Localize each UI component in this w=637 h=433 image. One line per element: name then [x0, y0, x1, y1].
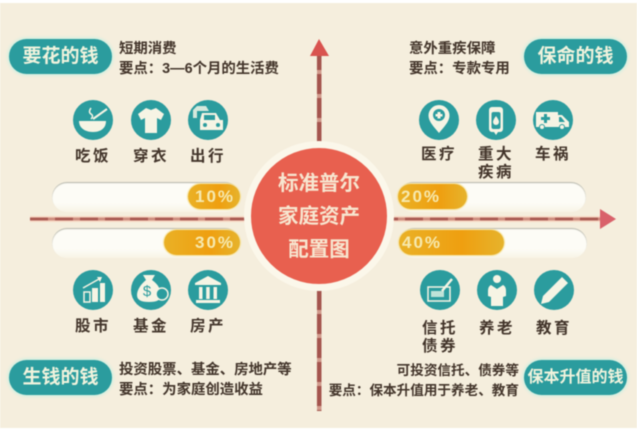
- icon: bank building: [187, 269, 229, 311]
- icon: t-shirt: [130, 99, 172, 141]
- label: 房产: 房产: [190, 318, 226, 335]
- pill: 保命的钱: 保命的钱: [537, 46, 614, 67]
- progress bar: 30%: 30%: [195, 233, 235, 252]
- progress bar: 10%: [52, 182, 240, 212]
- label: 养老: 养老: [479, 320, 515, 337]
- pill: 保本升值的钱: 保本升值的钱: [527, 369, 624, 386]
- center circle: 标准普尔: [278, 172, 360, 195]
- progress bar: 30%: [52, 228, 240, 258]
- text: investment: [118, 360, 292, 398]
- icon: ambulance: [532, 99, 574, 141]
- center circle: 配置图: [288, 238, 350, 261]
- progress bar: 10%: 10%: [195, 187, 235, 206]
- icon: cheque: [419, 269, 461, 311]
- text: short-term spending: 短期消费: [119, 41, 177, 57]
- label: 信托债券: [422, 319, 458, 354]
- label: 车祸: 车祸: [535, 146, 571, 163]
- pill: 保命的钱: [524, 39, 627, 74]
- label: 穿衣: 穿衣: [133, 148, 169, 165]
- label: 出行: 出行: [190, 148, 226, 165]
- icon: location pin: [418, 99, 460, 141]
- center circle: 家庭资产: [278, 205, 360, 228]
- progress bar: 40%: 40%: [402, 233, 442, 252]
- pill: 保本升值的钱: [524, 360, 627, 395]
- progress bar: 20%: [398, 182, 586, 212]
- pill: 生钱的钱: 生钱的钱: [22, 367, 98, 388]
- icon: pencil: [533, 269, 575, 311]
- text: investment: 要点：为家庭创造收益: [119, 382, 263, 398]
- label: 基金: 基金: [133, 318, 169, 335]
- icon: bowl: [72, 99, 114, 141]
- label: 重大疾病: 疾病: [478, 164, 514, 180]
- text: capital preservation: 要点：保本升值用于养老、教育: [329, 382, 519, 398]
- text: insurance: 要点：专款专用: [409, 60, 510, 76]
- label: 医疗: 医疗: [421, 146, 457, 163]
- pill: 要花的钱: 要花的钱: [22, 46, 98, 67]
- label: 信托债券: 债券: [422, 338, 458, 354]
- text: insurance: 意外重疾保障: [409, 41, 495, 57]
- pill: 生钱的钱: [9, 360, 112, 395]
- icon: money bag: [130, 269, 172, 311]
- label: 重大疾病: [478, 145, 514, 180]
- icon: IV bag: [475, 99, 517, 141]
- progress bar: 40%: [399, 228, 587, 258]
- progress bar: 20%: 20%: [401, 187, 441, 206]
- text: capital preservation: [328, 362, 520, 398]
- pill: 要花的钱: [9, 39, 112, 74]
- text: short-term spending: [118, 40, 279, 76]
- label: 吃饭: 吃饭: [75, 148, 111, 165]
- label: 信托债券: 信托: [422, 320, 458, 337]
- label: 教育: 教育: [536, 320, 572, 337]
- text: insurance: [408, 40, 510, 76]
- label: 股市: 股市: [75, 318, 111, 335]
- icon: person: [476, 269, 518, 311]
- text: short-term spending: 要点：3—6个月的生活费: [119, 60, 279, 76]
- text: capital preservation: 可投资信托、债券等: [397, 363, 519, 378]
- label: 重大疾病: 重大: [478, 146, 514, 163]
- icon: cars: [187, 99, 229, 141]
- text: investment: 投资股票、基金、房地产等: [119, 362, 292, 378]
- center circle: [244, 141, 394, 291]
- icon: money bag: $: [143, 283, 152, 300]
- icon: stock chart: [72, 269, 114, 311]
